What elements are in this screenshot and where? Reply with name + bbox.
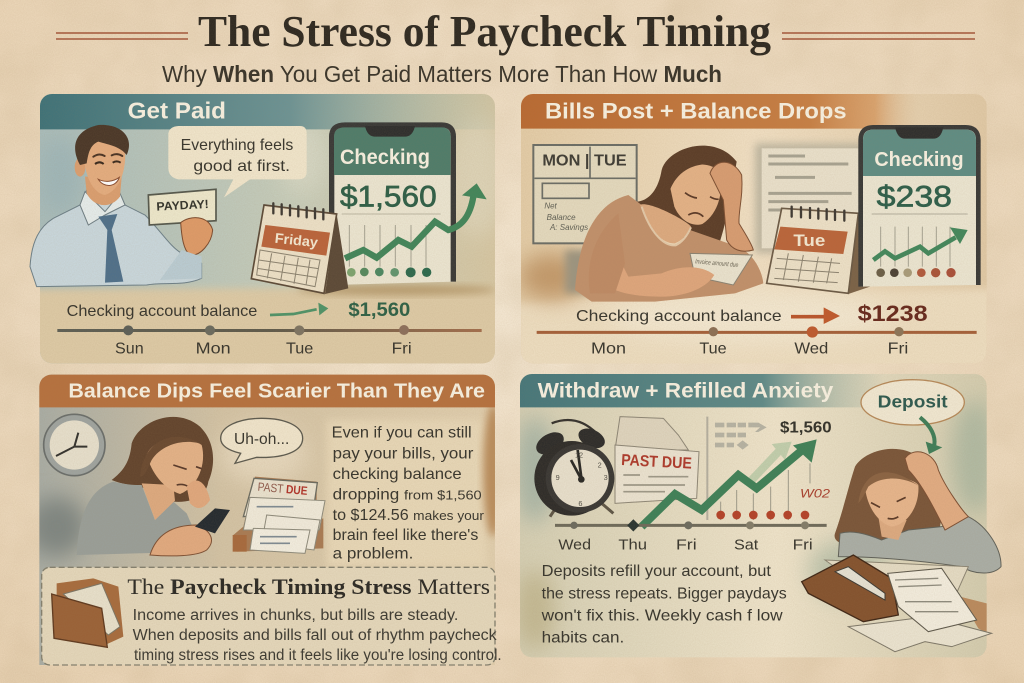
green mini arrow: [270, 303, 328, 315]
body text: a problem.: [333, 545, 413, 562]
body text: the stress repeats. Bigger paydays: [542, 585, 787, 602]
phone: checking balance: $238: [877, 181, 952, 214]
heading: withdraw: [520, 374, 987, 407]
phone: checking balance: Checking: [340, 145, 430, 169]
body text: pay your bills, your: [333, 445, 473, 462]
phone: checking balance: Checking: [874, 148, 964, 171]
title: The Stress of Paycheck Timing: [198, 7, 771, 56]
balance label: Checking account balance: [67, 303, 258, 320]
callout heading: The Paycheck Timing Stress Matters: [127, 574, 490, 599]
alarm clock: 2: [598, 460, 602, 469]
body text: [332, 425, 485, 562]
calendar: tue: [767, 207, 870, 294]
timeline: Wed: [794, 340, 828, 357]
alarm clock: 12: [575, 450, 583, 459]
body text: brain feel like there's: [333, 527, 478, 544]
wall calendar: Net: [544, 201, 558, 210]
wallet and papers: [802, 555, 992, 652]
body text: habits can.: [542, 630, 624, 647]
timeline: [537, 326, 977, 357]
body text: Deposits refill your account, but: [542, 563, 772, 580]
callout body: timing stress rises and it feels like you're losing control.: [134, 647, 502, 664]
balance value: $1238: [858, 301, 928, 326]
speech bubble: [168, 126, 307, 197]
overwhelmed woman: [835, 449, 1001, 573]
phone: checking balance: [861, 127, 978, 287]
deposit bubble: Deposit: [878, 391, 948, 411]
body text: dropping from $1,560: [333, 486, 482, 503]
balance label: Checking account balance: [576, 308, 782, 325]
wall calendar: [533, 145, 637, 243]
timeline: Thu: [618, 537, 647, 553]
body text: checking balance: [333, 466, 462, 483]
growth chart: $1,560: [780, 419, 832, 436]
body text: won't fix this. Weekly cash f low: [541, 608, 783, 625]
timeline: Mon: [196, 340, 231, 357]
stressed woman: [575, 146, 763, 302]
past due bills: PAST DUE: [257, 480, 308, 498]
icon: wallet: [52, 578, 123, 647]
timeline: Mon: [591, 340, 626, 357]
timeline: Tue: [286, 340, 314, 357]
body text: to $124.56 makes your: [333, 507, 485, 524]
background washes: [27, 403, 503, 567]
panel: get paid: [30, 94, 510, 375]
panel: withdraw and anxiety: [515, 374, 1001, 657]
alarm clock: 9: [556, 473, 560, 482]
past due papers: [615, 417, 699, 503]
man holding payday cheque: [30, 125, 216, 287]
calendar: tue: Tue: [793, 231, 825, 250]
body text: [541, 563, 787, 647]
alarm clock: 6: [578, 499, 582, 508]
background washes: [515, 400, 998, 650]
heading: get paid: [40, 94, 495, 129]
phone: checking balance: [332, 125, 453, 285]
callout: timing stress: [42, 567, 502, 665]
growth chart: [642, 417, 832, 527]
deposit bubble: [861, 380, 964, 425]
growth chart: W02: [800, 486, 830, 500]
callout body: When deposits and bills fall out of rhythm paycheck: [133, 627, 497, 644]
balance value: $1,560: [348, 300, 410, 321]
timeline: Fri: [793, 537, 813, 553]
alarm clock: [532, 420, 614, 517]
speech bubble: Uh-oh...: [234, 431, 289, 448]
callout body: [133, 607, 502, 664]
timeline: Tue: [699, 340, 727, 357]
timeline: Fri: [392, 340, 412, 357]
background washes: [515, 143, 995, 377]
desk: [960, 597, 987, 633]
background washes: [40, 123, 495, 364]
past due bills: [233, 477, 325, 553]
heading: balance dips: [39, 375, 495, 407]
timeline: Fri: [676, 537, 697, 553]
alarm clock: 3: [604, 473, 608, 482]
wall clock: [44, 414, 105, 476]
calendar: friday: [251, 203, 348, 294]
calendar: friday: Friday: [274, 230, 319, 250]
timeline: Sat: [734, 537, 758, 553]
body text: Even if you can still: [332, 425, 472, 442]
speech bubble: Everything feels: [181, 137, 294, 154]
red arrow: [791, 307, 840, 324]
heading: bills post: [521, 94, 987, 129]
phone: checking balance: $1,560: [340, 181, 437, 214]
wall calendar: MON | TUE: [542, 152, 627, 169]
panel: bills post: [515, 94, 995, 377]
timeline: [57, 325, 482, 357]
heading: balance dips: Balance Dips Feel Scarier Than They Are: [68, 379, 485, 402]
green arrow: [345, 197, 473, 258]
heading: withdraw: Withdraw + Refilled Anxiety: [538, 378, 833, 402]
wall calendar: Balance: [547, 213, 576, 222]
timeline: [555, 519, 827, 553]
heading: bills post: Bills Post + Balance Drops: [545, 98, 847, 123]
callout body: Income arrives in chunks, but bills are steady.: [133, 607, 458, 624]
timeline: Sun: [115, 340, 144, 357]
timeline: Wed: [558, 537, 591, 553]
title: [56, 7, 975, 56]
man holding payday cheque: PAYDAY!: [156, 197, 209, 214]
timeline: Fri: [888, 340, 908, 357]
wall calendar: A: Savings: [549, 223, 588, 232]
past due papers: PAST DUE: [621, 452, 693, 473]
bill sheet: [762, 148, 858, 248]
speech bubble: good at first.: [193, 158, 290, 175]
heading: get paid: Get Paid: [128, 97, 226, 123]
panel: balance dips: [27, 375, 503, 665]
speech bubble: [221, 418, 303, 463]
green arrow: [920, 417, 942, 454]
subtitle: Why When You Get Paid Matters More Than How Much: [162, 61, 722, 87]
stressed woman: Invoice amount due: [695, 258, 739, 269]
worried woman with phone: [77, 417, 230, 556]
